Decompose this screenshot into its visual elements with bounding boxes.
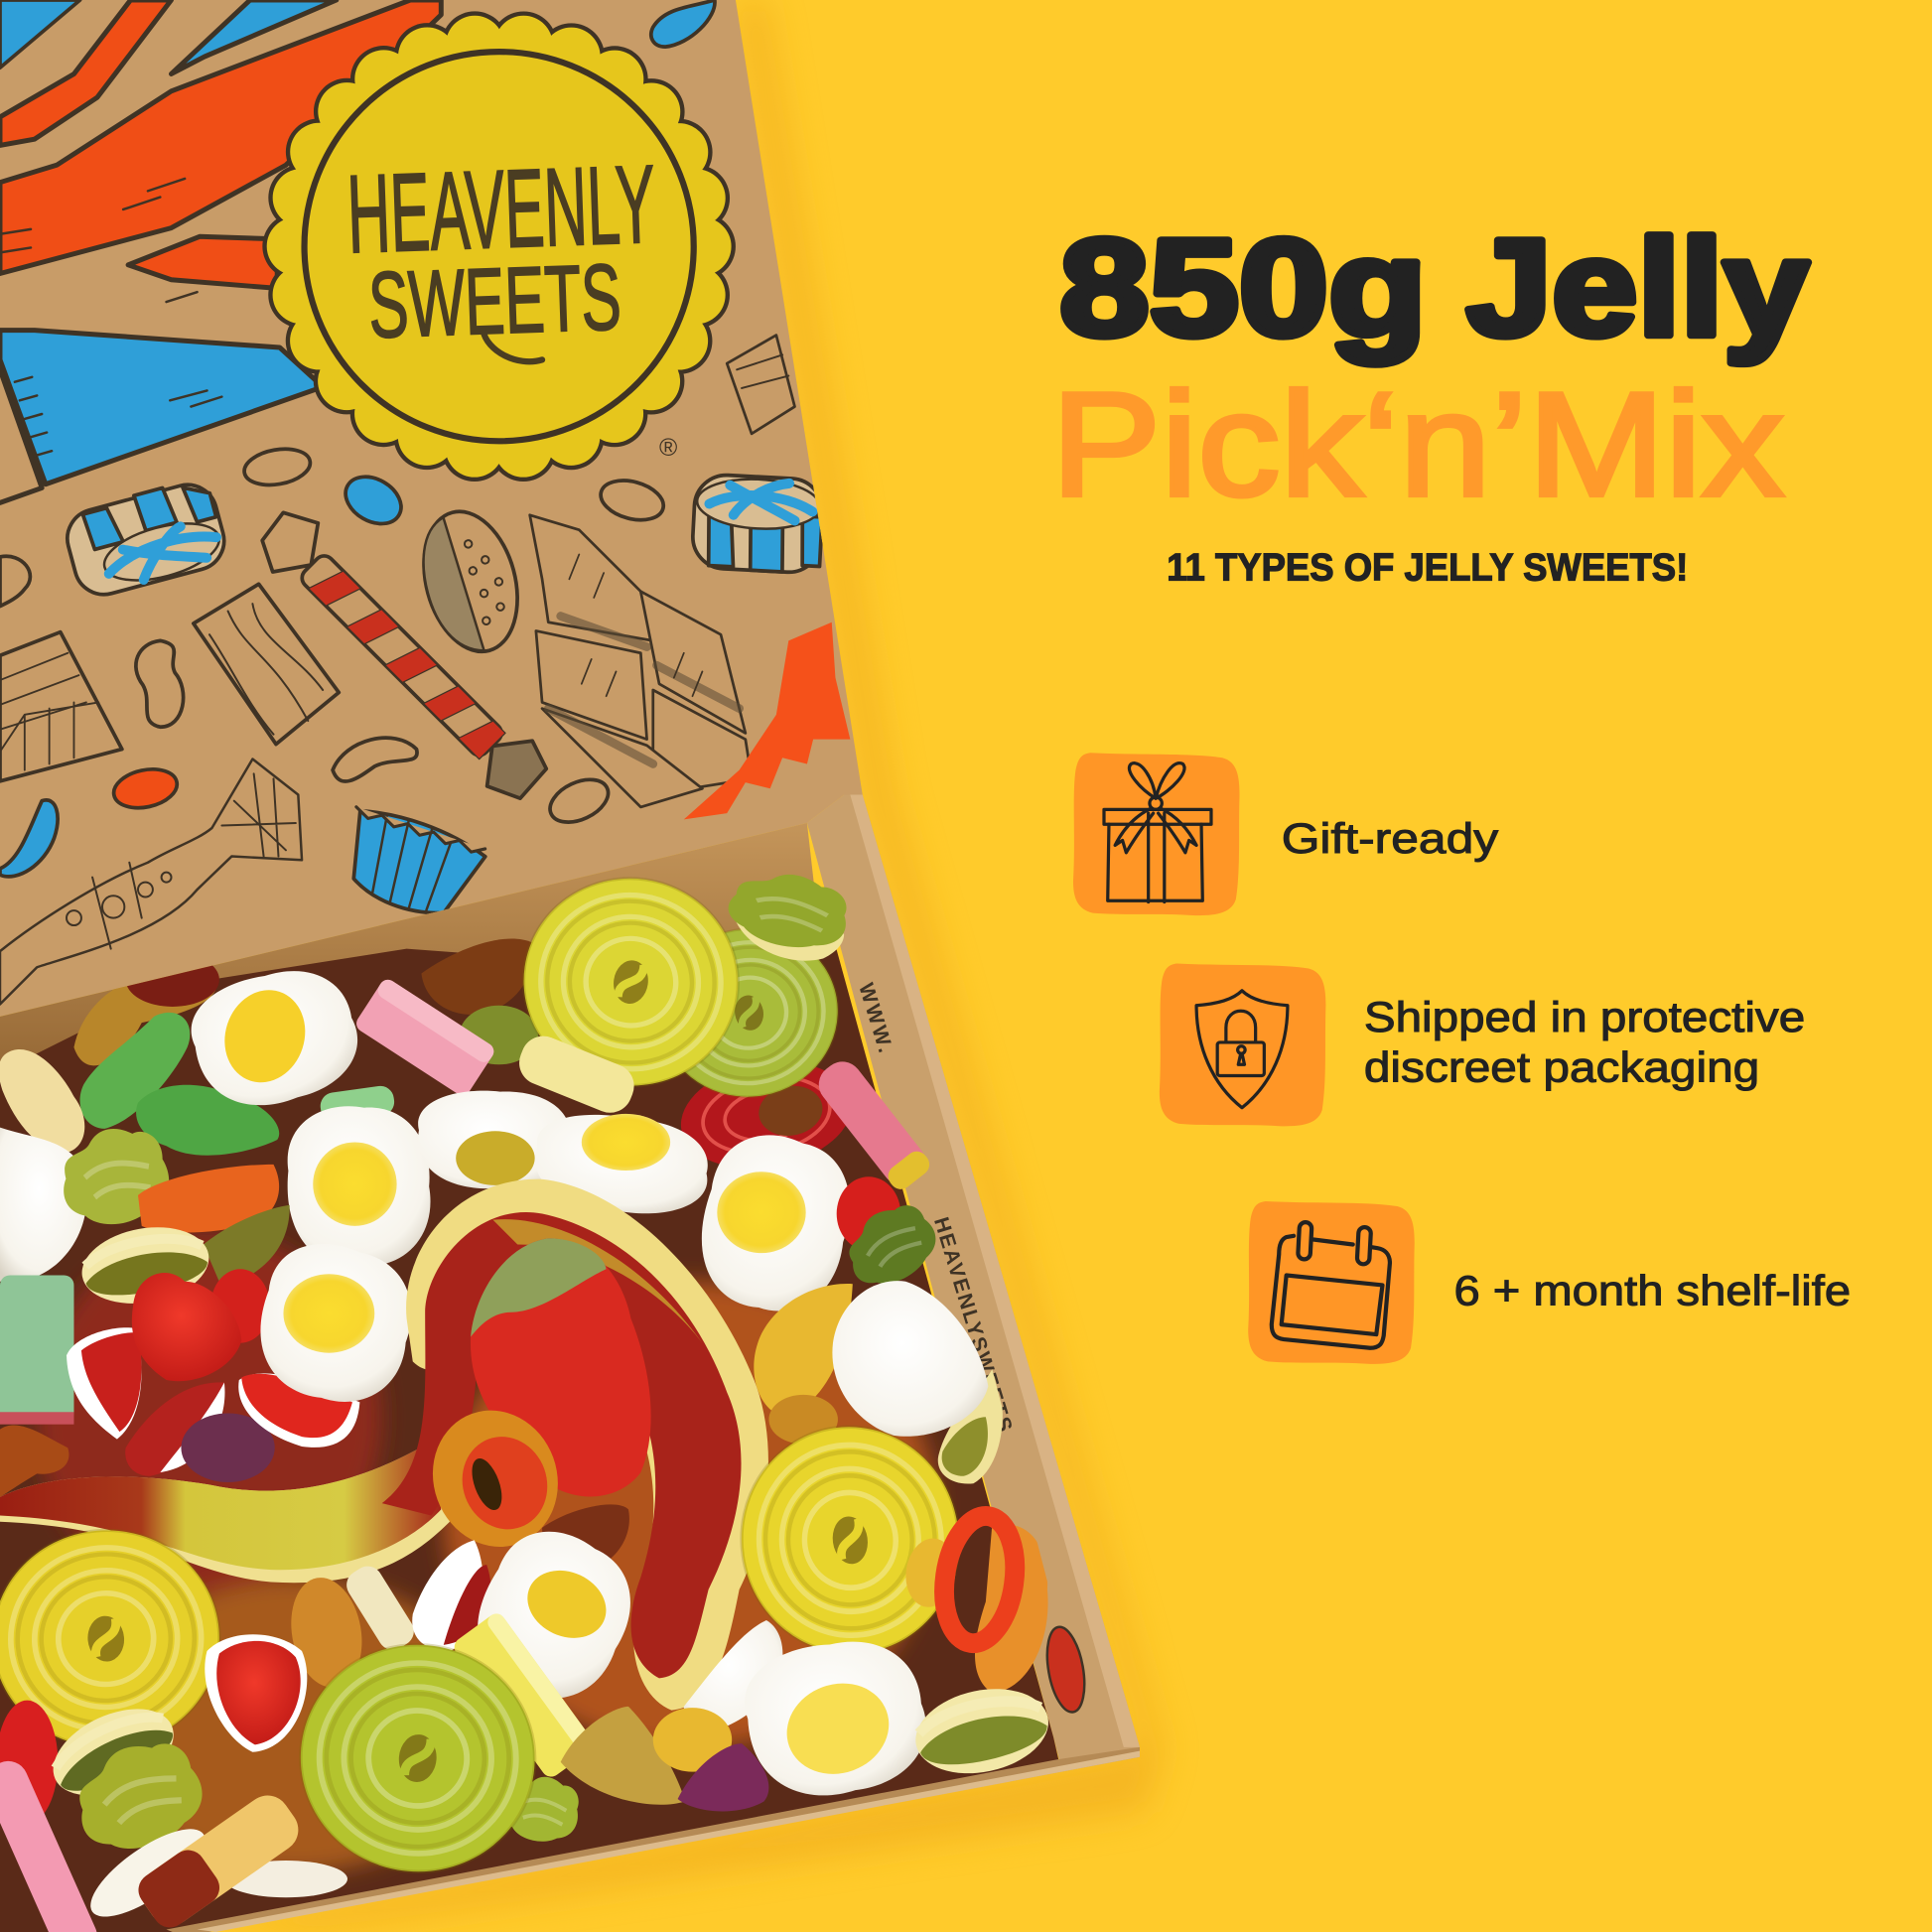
amber bottle bottom bbox=[132, 1787, 307, 1932]
orange splash bbox=[684, 622, 850, 819]
snake tail bbox=[0, 1442, 450, 1583]
biscuit bbox=[422, 509, 519, 653]
box lid kraft panel bbox=[0, 0, 863, 1017]
olive jelly bbox=[204, 1205, 290, 1288]
big snake body bbox=[382, 1179, 768, 1711]
egg 4 bbox=[684, 1122, 867, 1325]
pink stick bottom left bbox=[0, 1755, 103, 1932]
green stick bbox=[0, 1276, 73, 1425]
wrapped bow candy bbox=[0, 759, 302, 1004]
striped candy left bbox=[66, 483, 226, 597]
interior back wall bbox=[0, 823, 826, 1109]
lid illustration bbox=[0, 0, 850, 1004]
wall outer lip bbox=[850, 794, 1140, 1747]
seal swoosh bbox=[483, 331, 542, 361]
egg 5 bbox=[244, 1231, 427, 1417]
yellow-green frog bbox=[55, 1120, 176, 1232]
wall printed url bbox=[854, 981, 1017, 1437]
cream stick bbox=[512, 1030, 640, 1120]
red gummy bbox=[837, 1176, 900, 1251]
striped stick candy bbox=[260, 510, 548, 800]
feature: shelf life bbox=[1248, 1201, 1851, 1364]
heading line one: Jelly bbox=[1466, 211, 1809, 365]
red-white sweet lower bbox=[125, 1382, 224, 1476]
red-orange link bbox=[897, 1506, 1023, 1648]
heading line one bbox=[1059, 211, 1809, 365]
marshmallow left bbox=[0, 1128, 87, 1282]
dark frog bbox=[834, 1192, 947, 1299]
box drop shadow bbox=[173, 0, 1165, 1932]
feature: gift-ready bbox=[1073, 753, 1499, 915]
sweets bbox=[0, 863, 1059, 1932]
icon: gift box bbox=[1073, 753, 1240, 915]
seal wordmark: SWEETS bbox=[366, 244, 622, 357]
icon: calendar bbox=[1248, 1201, 1415, 1364]
wall printed red sweet bbox=[1041, 1624, 1090, 1715]
amber gummy bbox=[768, 1395, 838, 1445]
red behind bbox=[210, 1269, 270, 1343]
dark amber cluster top-left bbox=[73, 965, 219, 1066]
bottle lower left bbox=[0, 1426, 69, 1497]
amber blob bbox=[653, 1708, 732, 1772]
seal wordmark bbox=[345, 142, 657, 357]
green jelly bbox=[460, 1006, 538, 1064]
wall printed url: HEAVENLYSWEETS bbox=[929, 1214, 1017, 1437]
icon: shield padlock bbox=[1160, 964, 1325, 1126]
orange bear bbox=[975, 1525, 1048, 1693]
burger bottom left bbox=[40, 1692, 187, 1813]
egg 7 bbox=[737, 1629, 936, 1808]
half-hidden egg bbox=[418, 1091, 571, 1188]
feature: protective packaging bbox=[1160, 964, 1805, 1126]
amber bits bbox=[283, 1561, 419, 1693]
strawberry white small bbox=[205, 1634, 307, 1752]
heading bbox=[1051, 211, 1809, 590]
label: Shipped in protective bbox=[1364, 994, 1805, 1040]
yellow stick bbox=[451, 1610, 597, 1780]
registered mark: ® bbox=[659, 435, 677, 462]
pale white sweet bbox=[684, 1620, 782, 1732]
olive frog bbox=[63, 1728, 214, 1864]
burger left bbox=[75, 1218, 214, 1312]
brown bottle bbox=[421, 938, 533, 1015]
purple gummy bbox=[678, 1743, 768, 1811]
green bears bbox=[80, 1013, 279, 1156]
cream-red sweet bbox=[412, 1540, 491, 1651]
egg 2 bbox=[288, 1106, 431, 1267]
label: 6 + month shelf-life bbox=[1453, 1267, 1851, 1313]
bottom lip of box bbox=[167, 1747, 1140, 1932]
heart bbox=[132, 1273, 241, 1381]
orange jelly bbox=[138, 1165, 279, 1233]
burger lower right bbox=[907, 1678, 1056, 1785]
chocolate pile bbox=[530, 336, 794, 807]
heading line two: Pick‘n’Mix bbox=[1051, 361, 1784, 527]
red-white sweets bbox=[67, 1327, 142, 1440]
yellow ring top bbox=[510, 865, 752, 1099]
green ring back bbox=[647, 915, 851, 1111]
heading line one: 850g bbox=[1059, 211, 1427, 365]
dark gummy centre bbox=[542, 1504, 629, 1575]
subheading: 11 TYPES OF JELLY SWEETS! bbox=[1167, 547, 1688, 590]
red oval left bbox=[0, 1701, 58, 1824]
pink sweet bbox=[353, 977, 497, 1098]
wall printed url: WWW. bbox=[854, 981, 897, 1057]
ring green bottom bbox=[291, 1635, 544, 1881]
right wall of box bbox=[807, 794, 1140, 1762]
label: discreet packaging bbox=[1364, 1044, 1759, 1091]
light green jelly bbox=[319, 1084, 396, 1124]
pale bear bbox=[0, 1049, 84, 1154]
red ring back bbox=[672, 1049, 861, 1181]
white lower bbox=[78, 1814, 347, 1932]
egg 3 bbox=[530, 1108, 713, 1221]
wrapped bar bbox=[0, 632, 122, 781]
logo seal bbox=[287, 35, 711, 459]
label bbox=[1364, 994, 1805, 1091]
seal wordmark: HEAVENLY bbox=[345, 142, 657, 276]
striped candy right bbox=[691, 474, 824, 574]
orange ring bbox=[414, 1393, 577, 1565]
ring left bbox=[0, 1521, 228, 1756]
chocolate bar bbox=[194, 584, 339, 745]
egg 6 bbox=[453, 1512, 654, 1721]
egg 1 bbox=[181, 955, 369, 1121]
gold bear bbox=[754, 1284, 853, 1417]
strawberry bbox=[471, 1238, 651, 1496]
white marshmallow bbox=[832, 1281, 988, 1437]
ring right bbox=[727, 1413, 973, 1668]
frog top right bbox=[723, 863, 854, 961]
cupcake case bbox=[351, 805, 487, 914]
seal scalloped badge bbox=[287, 35, 711, 459]
red white candy bbox=[238, 1373, 359, 1448]
purple jelly bbox=[181, 1414, 275, 1482]
burger right upper bbox=[938, 1368, 1003, 1484]
label: Gift-ready bbox=[1282, 815, 1499, 862]
pale bottle bbox=[561, 1707, 685, 1805]
green frog base bbox=[498, 1770, 584, 1848]
panel: product box bbox=[0, 0, 1140, 1932]
pink stick right bbox=[811, 1053, 934, 1193]
